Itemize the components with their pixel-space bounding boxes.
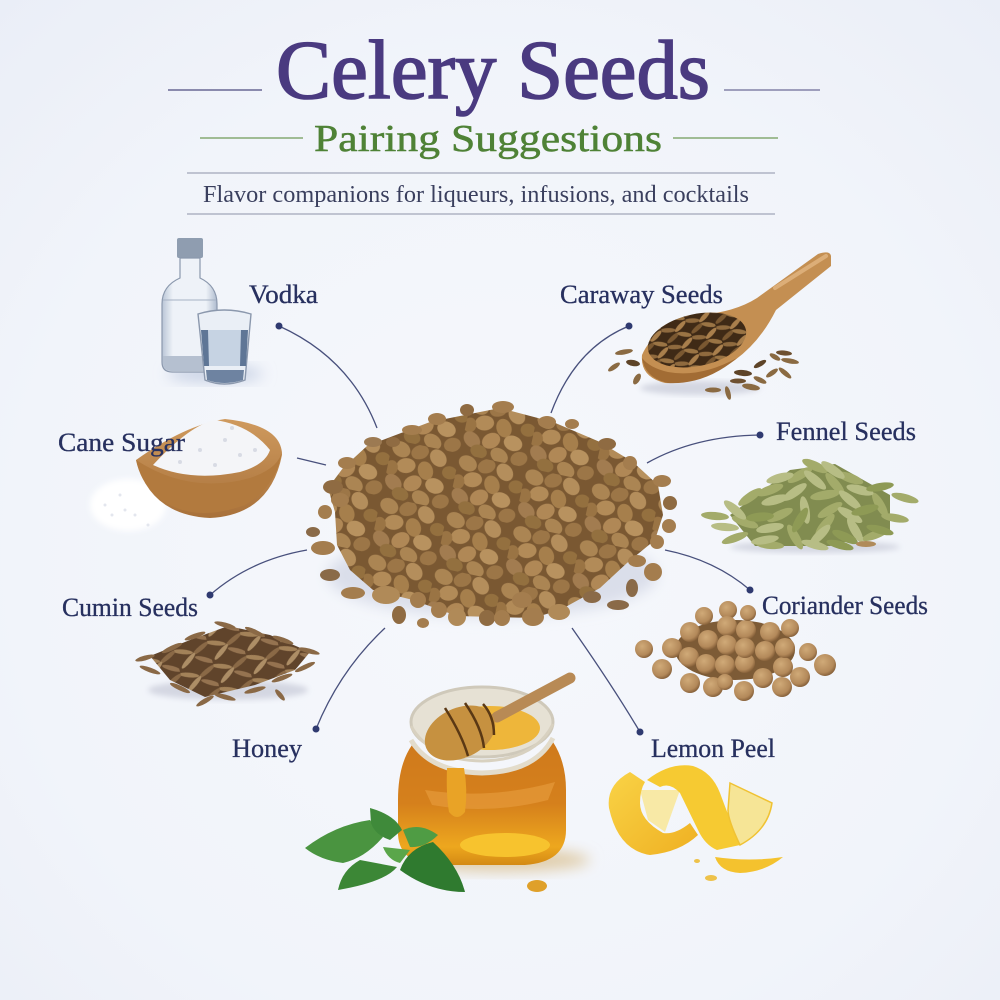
central celery seed pile xyxy=(306,401,677,628)
subtitle: Pairing Suggestions xyxy=(314,118,662,160)
connector: caraway seeds xyxy=(551,322,632,413)
label: honey: Honey xyxy=(232,734,302,763)
connector: fennel seeds xyxy=(647,432,764,463)
title rule right xyxy=(724,89,820,91)
label: cumin seeds: Cumin Seeds xyxy=(62,593,198,622)
connector: cumin seeds xyxy=(206,550,307,598)
connector: lemon peel xyxy=(572,628,644,736)
subtitle rule right xyxy=(673,137,778,139)
label: caraway seeds: Caraway Seeds xyxy=(560,280,723,309)
label: fennel seeds: Fennel Seeds xyxy=(776,417,916,446)
connector: coriander seeds xyxy=(665,550,754,594)
icon: cumin seeds xyxy=(135,620,320,708)
label: cane sugar: Cane Sugar xyxy=(58,428,185,457)
label: lemon peel: Lemon Peel xyxy=(651,734,775,763)
label: coriander seeds: Coriander Seeds xyxy=(762,591,928,620)
icon: honey jar with dipper xyxy=(398,678,590,892)
subtitle rule left xyxy=(200,137,303,139)
label: vodka: Vodka xyxy=(249,280,318,309)
icon: coriander seeds xyxy=(635,601,836,701)
title: Celery Seeds xyxy=(276,24,710,117)
icon: fennel seeds xyxy=(701,456,920,553)
connector: cane sugar xyxy=(297,458,326,465)
icon: cane sugar bowl xyxy=(90,419,282,531)
icon: mint sprig xyxy=(305,808,465,892)
connector: honey xyxy=(312,628,385,732)
tagline: Flavor companions for liqueurs, infusions, and cocktails xyxy=(203,182,749,208)
icon: vodka bottle and glass xyxy=(162,238,263,384)
connector: vodka xyxy=(276,322,377,428)
icon: lemon peel xyxy=(609,765,783,881)
title rule left xyxy=(168,89,262,91)
icon: caraway seeds in wooden spoon xyxy=(607,252,831,400)
